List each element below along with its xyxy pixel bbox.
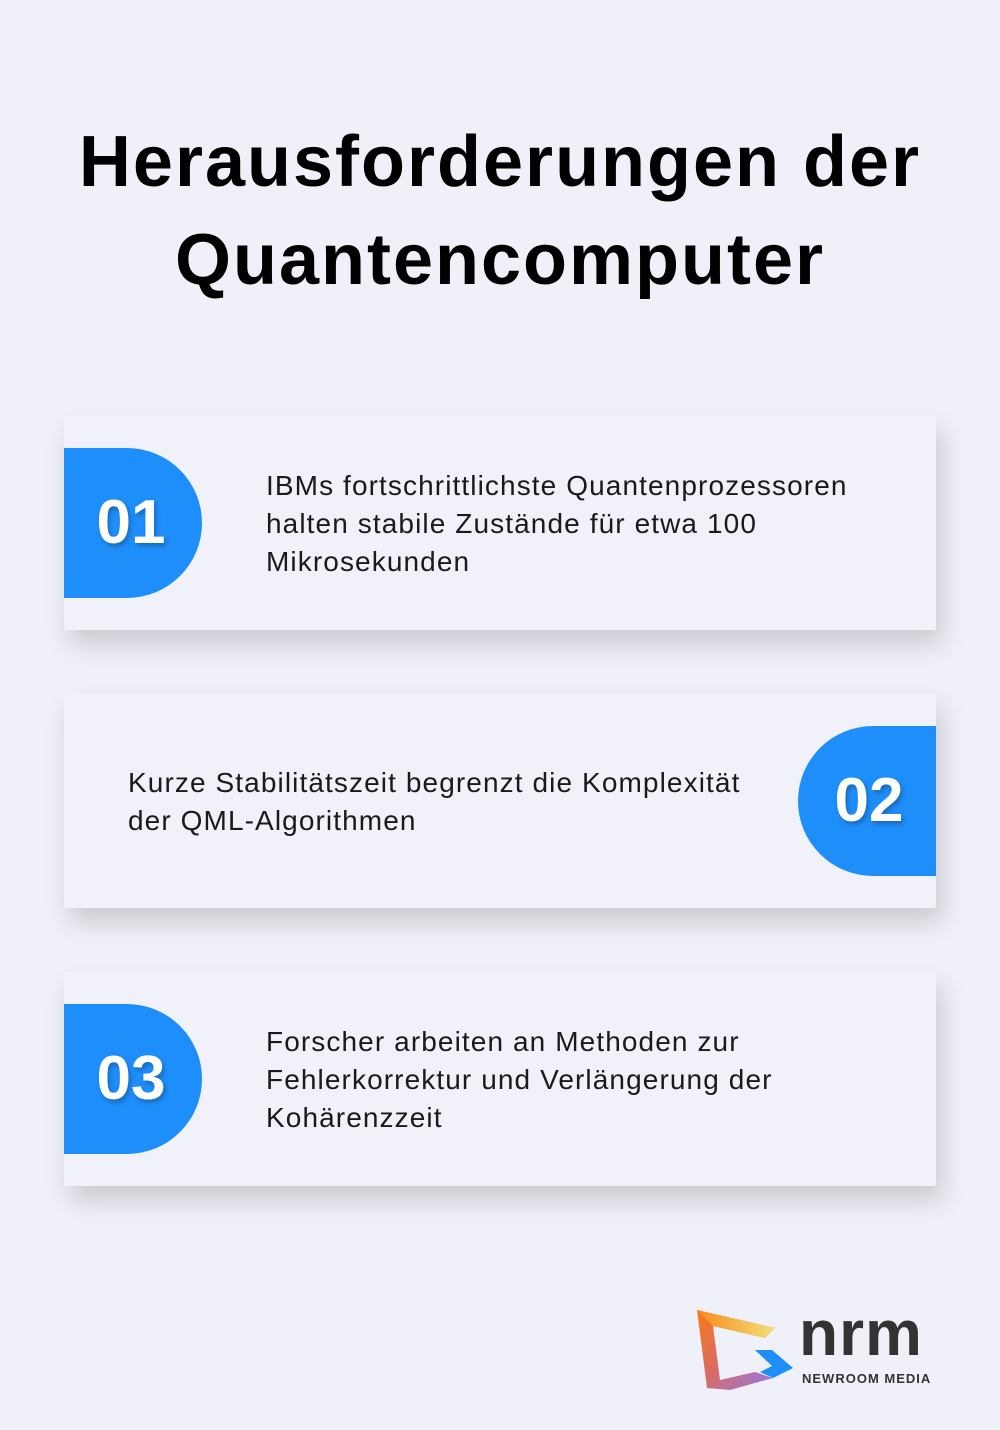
title: Herausforderungen der xyxy=(79,122,921,202)
badge 01 xyxy=(64,448,202,598)
text 3: Kohärenzzeit xyxy=(266,1102,443,1133)
text 2: der QML-Algorithmen xyxy=(128,805,417,836)
text 3 xyxy=(266,1026,773,1133)
badge 02: 02 xyxy=(835,766,903,835)
panel: card 1 xyxy=(64,416,936,630)
text 1: halten stabile Zustände für etwa 100 xyxy=(266,508,757,539)
icon: logo mark xyxy=(697,1310,793,1390)
text 1 xyxy=(266,470,848,577)
text 2: Kurze Stabilitätszeit begrenzt die Komplexität xyxy=(128,767,740,798)
title: Quantencomputer xyxy=(175,220,825,300)
text 1: IBMs fortschrittlichste Quantenprozessoren xyxy=(266,470,848,501)
panel: card 3 xyxy=(64,972,936,1186)
text 1: Mikrosekunden xyxy=(266,546,470,577)
text 3: Forscher arbeiten an Methoden zur xyxy=(266,1026,740,1057)
panel: card 2 xyxy=(64,694,936,908)
badge 02 xyxy=(798,726,936,876)
badge 03 xyxy=(64,1004,202,1154)
logo: NEWROOM MEDIA xyxy=(802,1371,931,1386)
logo xyxy=(697,1297,931,1390)
text 3: Fehlerkorrektur und Verlängerung der xyxy=(266,1064,773,1095)
title xyxy=(79,122,921,300)
text 2 xyxy=(128,767,740,836)
logo text: nrm xyxy=(799,1297,923,1369)
badge 03: 03 xyxy=(97,1044,165,1113)
badge 01: 01 xyxy=(97,488,165,557)
